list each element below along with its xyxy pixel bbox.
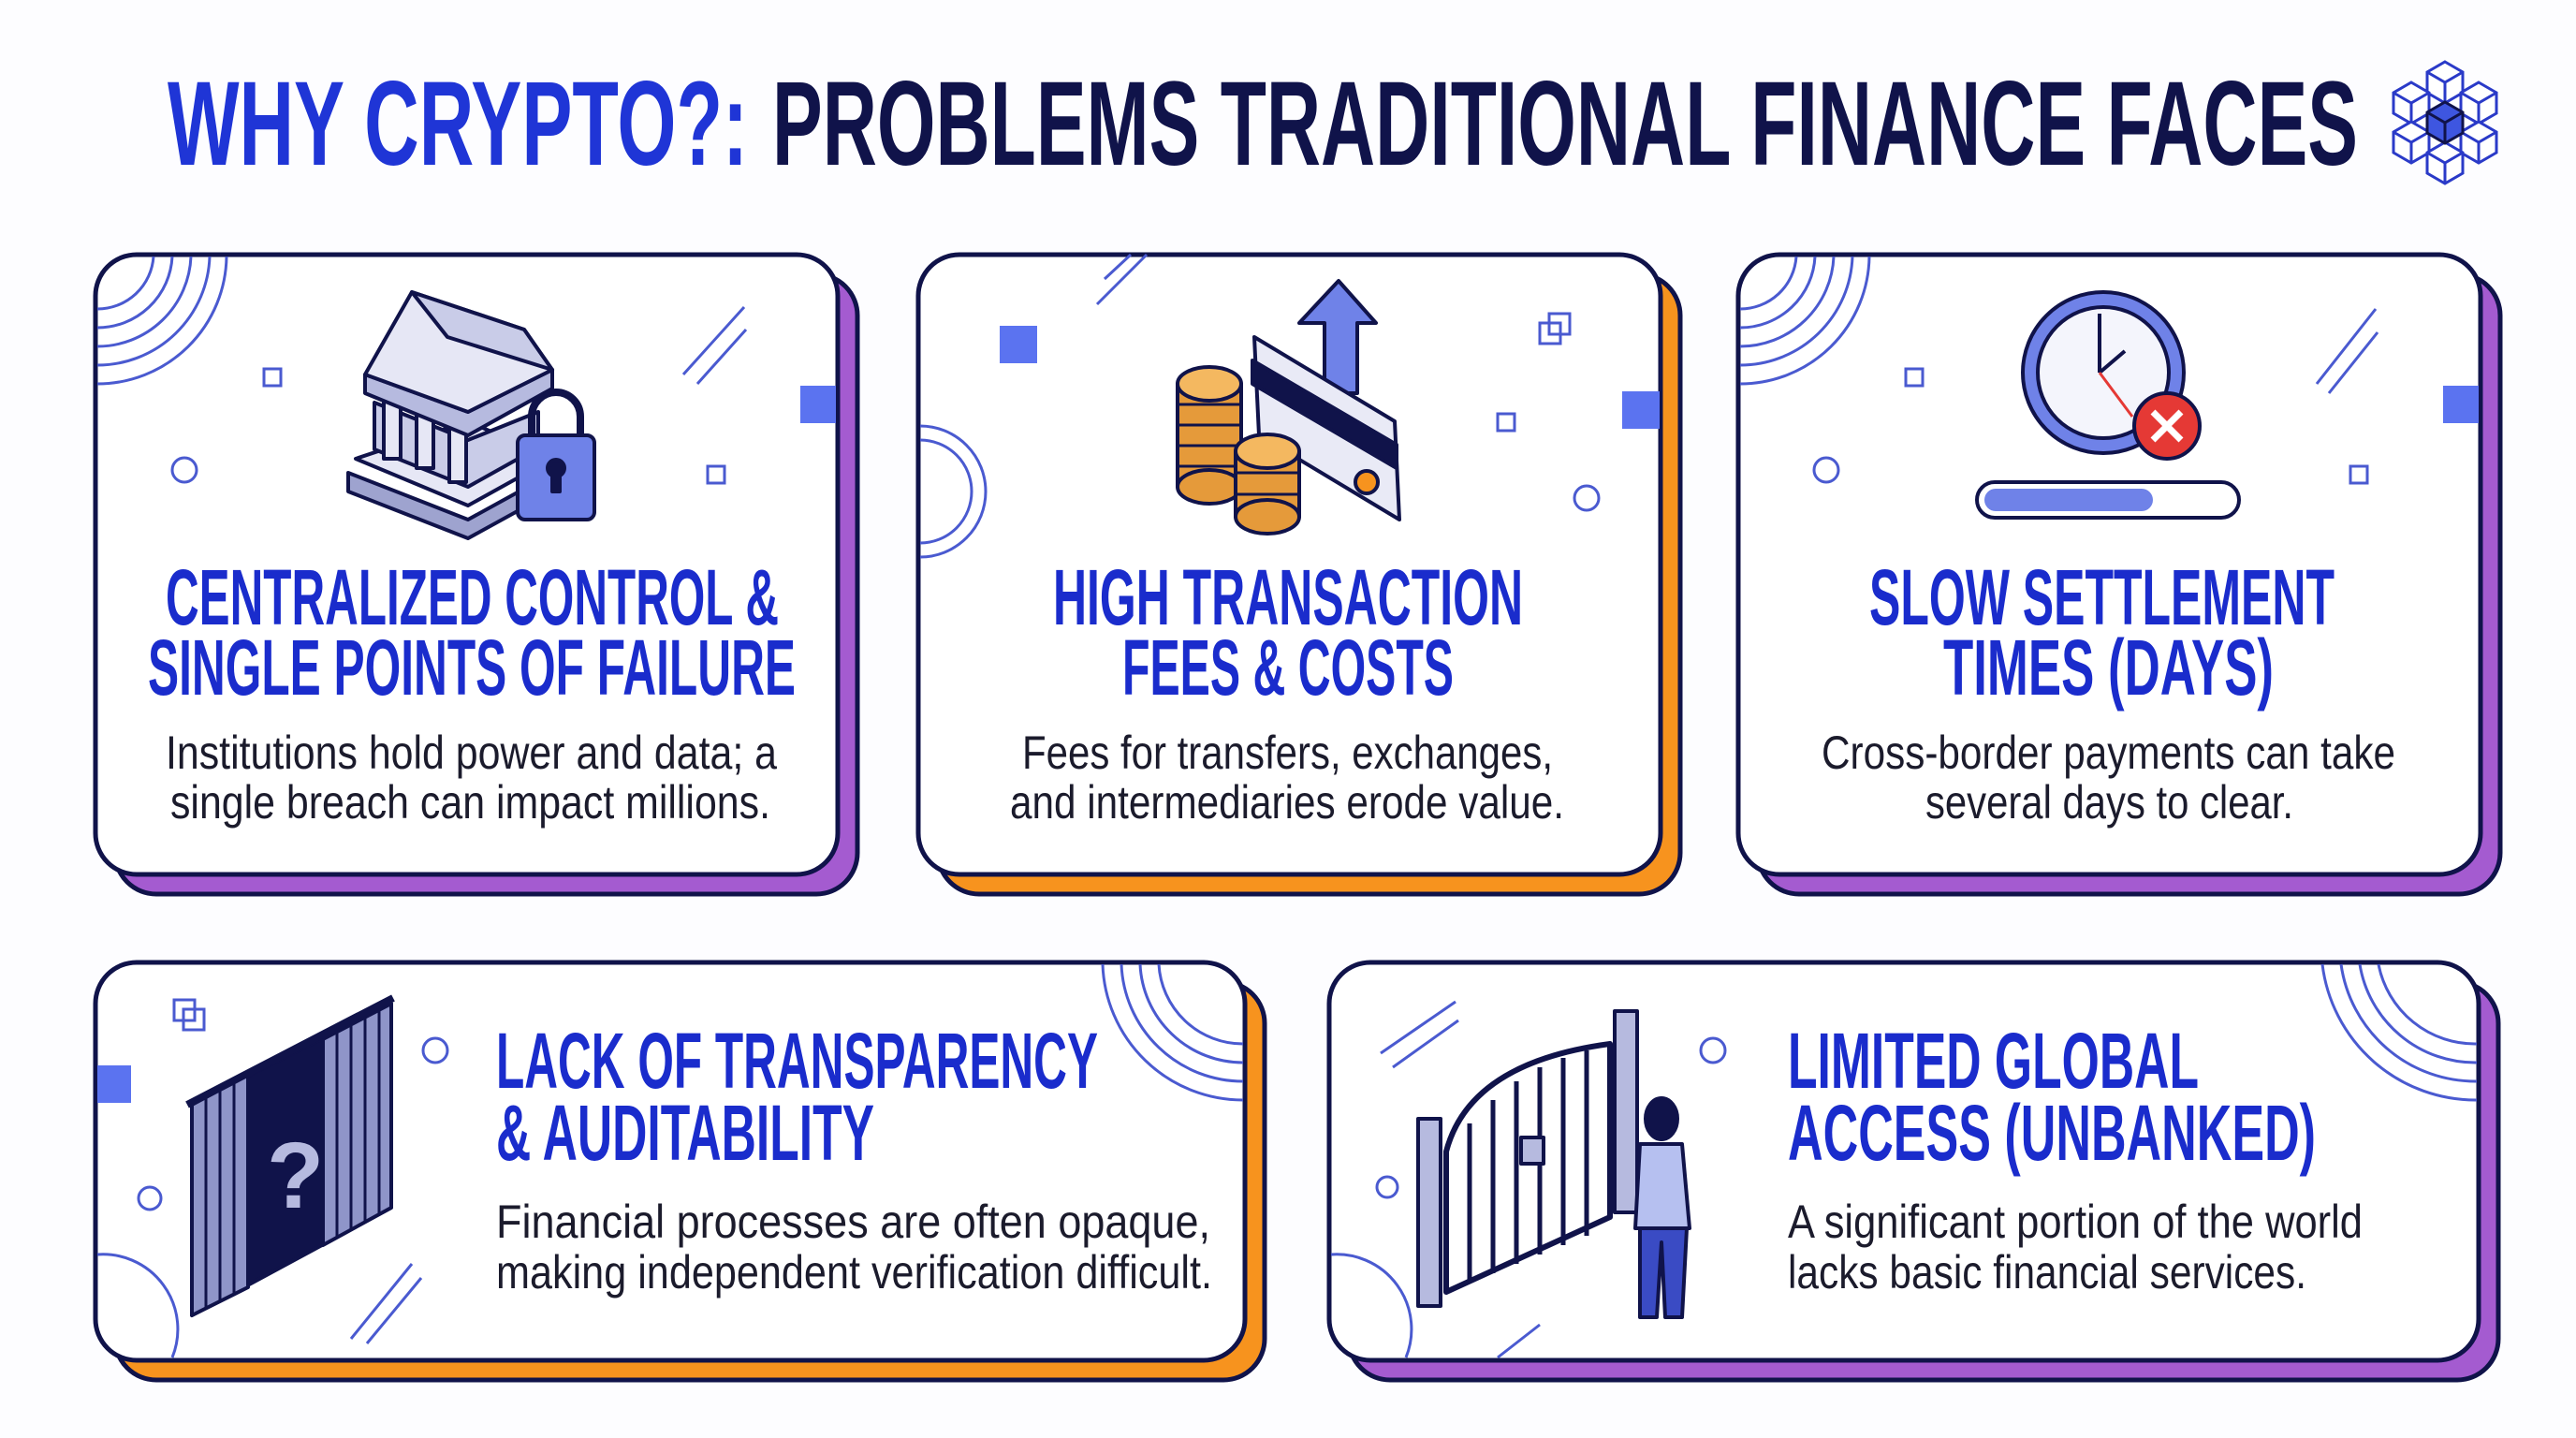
heading (1869, 553, 2334, 712)
title: WHY CRYPTO?: (168, 57, 748, 191)
heading: LACK OF TRANSPARENCY (496, 1017, 1098, 1105)
heading: HIGH TRANSACTION (1053, 553, 1523, 641)
text block (166, 726, 777, 829)
icon: coins, card and arrow (1178, 281, 1399, 534)
text block: A significant portion of the world (1788, 1196, 2363, 1248)
panel: high fees (918, 255, 1680, 894)
text block: Fees for transfers, exchanges, (1022, 726, 1553, 779)
icon: clock with red x and progress bar (1977, 292, 2239, 518)
heading (148, 553, 796, 712)
heading (1788, 1017, 2316, 1177)
heading (496, 1017, 1098, 1177)
heading (1053, 553, 1523, 712)
text block: and intermediaries erode value. (1010, 776, 1564, 829)
heading: LIMITED GLOBAL (1788, 1017, 2199, 1105)
text block: Institutions hold power and data; a (166, 726, 777, 779)
icon: gate and person (1418, 1011, 1690, 1317)
panel: slow settlement (1738, 255, 2500, 894)
text block (496, 1196, 1212, 1299)
text block: several days to clear. (1925, 776, 2293, 829)
panel: limited global access (1329, 962, 2498, 1380)
text block: Cross-border payments can take (1822, 726, 2395, 779)
text block: Financial processes are often opaque, (496, 1196, 1210, 1248)
heading: SINGLE POINTS OF FAILURE (148, 624, 796, 712)
icon: bank with lock (348, 292, 594, 538)
icon: blockchain cubes (2393, 62, 2496, 183)
text block: making independent verification difficult. (496, 1246, 1212, 1299)
text block: single breach can impact millions. (170, 776, 770, 829)
heading: & AUDITABILITY (496, 1089, 874, 1177)
text block (1788, 1196, 2363, 1299)
heading: CENTRALIZED CONTROL & (166, 553, 779, 641)
icon: curtain with question mark: ? (267, 1123, 324, 1228)
text block (1010, 726, 1564, 829)
panel: lack of transparency (95, 962, 1265, 1380)
panel: centralized control (95, 255, 857, 894)
title (168, 57, 2358, 191)
text block (1822, 726, 2395, 829)
heading: TIMES (DAYS) (1943, 624, 2274, 712)
icon: curtain with question mark (187, 998, 393, 1315)
heading: FEES & COSTS (1122, 624, 1454, 712)
text block: lacks basic financial services. (1788, 1246, 2306, 1299)
